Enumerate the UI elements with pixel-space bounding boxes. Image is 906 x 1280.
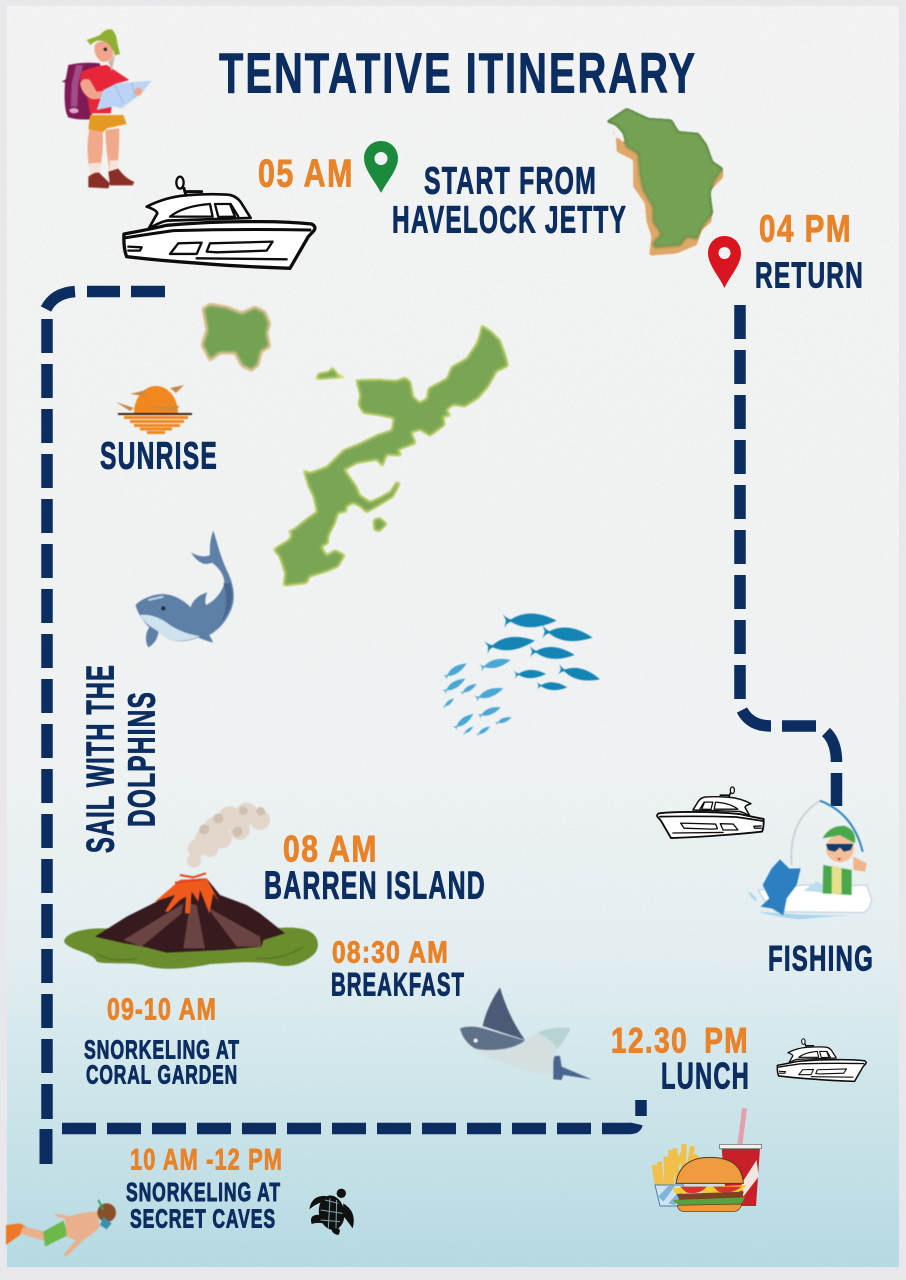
time: 08:30 AM: 08:30 AM [332, 934, 449, 970]
icon: boat at start [124, 177, 315, 268]
label: sunrise: SUNRISE [100, 436, 218, 478]
time: 12.30 PM: 12.30 PM [611, 1022, 749, 1060]
label: sail with the dolphins: DOLPHINS [122, 691, 164, 827]
label: lunch: LUNCH [661, 1056, 750, 1096]
icon: small boat near fishing [657, 787, 764, 838]
label: snorkeling at coral garden: SNORKELING AT [84, 1034, 240, 1064]
time: 08 AM: 08 AM [283, 828, 378, 870]
label: sail with the dolphins: SAIL WITH THE [80, 664, 122, 853]
icon: red return pin [708, 236, 741, 288]
icon: green start pin [364, 141, 398, 193]
map: small north island [202, 304, 270, 371]
time: 10 AM - 12 PM: 10 AM -12 PM [130, 1144, 283, 1176]
icon: traveller with map [62, 29, 152, 188]
start location text [392, 160, 627, 242]
icon: dolphin [136, 531, 234, 647]
icon: snorkeler [6, 1200, 116, 1257]
map: top right island [605, 108, 723, 256]
dashed route [46, 292, 836, 1164]
label: snorkeling at secret caves [126, 1179, 281, 1234]
label: snorkeling at coral garden: CORAL GARDEN [86, 1060, 238, 1090]
icon: sea turtle [309, 1189, 354, 1235]
label: breakfast: BREAKFAST [331, 966, 465, 1002]
icon: volcano island [64, 803, 318, 969]
icon: school of fish [442, 613, 601, 737]
label: sail with the dolphins [80, 664, 164, 853]
label: snorkeling at secret caves: SNORKELING AT [126, 1179, 281, 1207]
icon: fisherman on boat [748, 801, 872, 919]
title: TENTATIVE ITINERARY [219, 42, 697, 106]
time: 04 PM: 04 PM [759, 208, 852, 250]
time: 09-10 AM: 09-10 AM [107, 992, 217, 1026]
time: 05 AM: 05 AM [258, 152, 354, 196]
label: snorkeling at secret caves: SECRET CAVES [130, 1206, 276, 1234]
label: barren island: BARREN ISLAND [264, 864, 486, 908]
label: snorkeling at coral garden [84, 1034, 240, 1090]
icon: manta ray [460, 987, 592, 1080]
start location text: START FROM [424, 160, 597, 202]
icon: sunrise [116, 385, 192, 432]
icon: burger, fries and drink [654, 1108, 762, 1212]
start location text: HAVELOCK JETTY [392, 200, 627, 242]
map: main island chain [273, 325, 508, 586]
icon: small boat near lunch [777, 1039, 866, 1081]
